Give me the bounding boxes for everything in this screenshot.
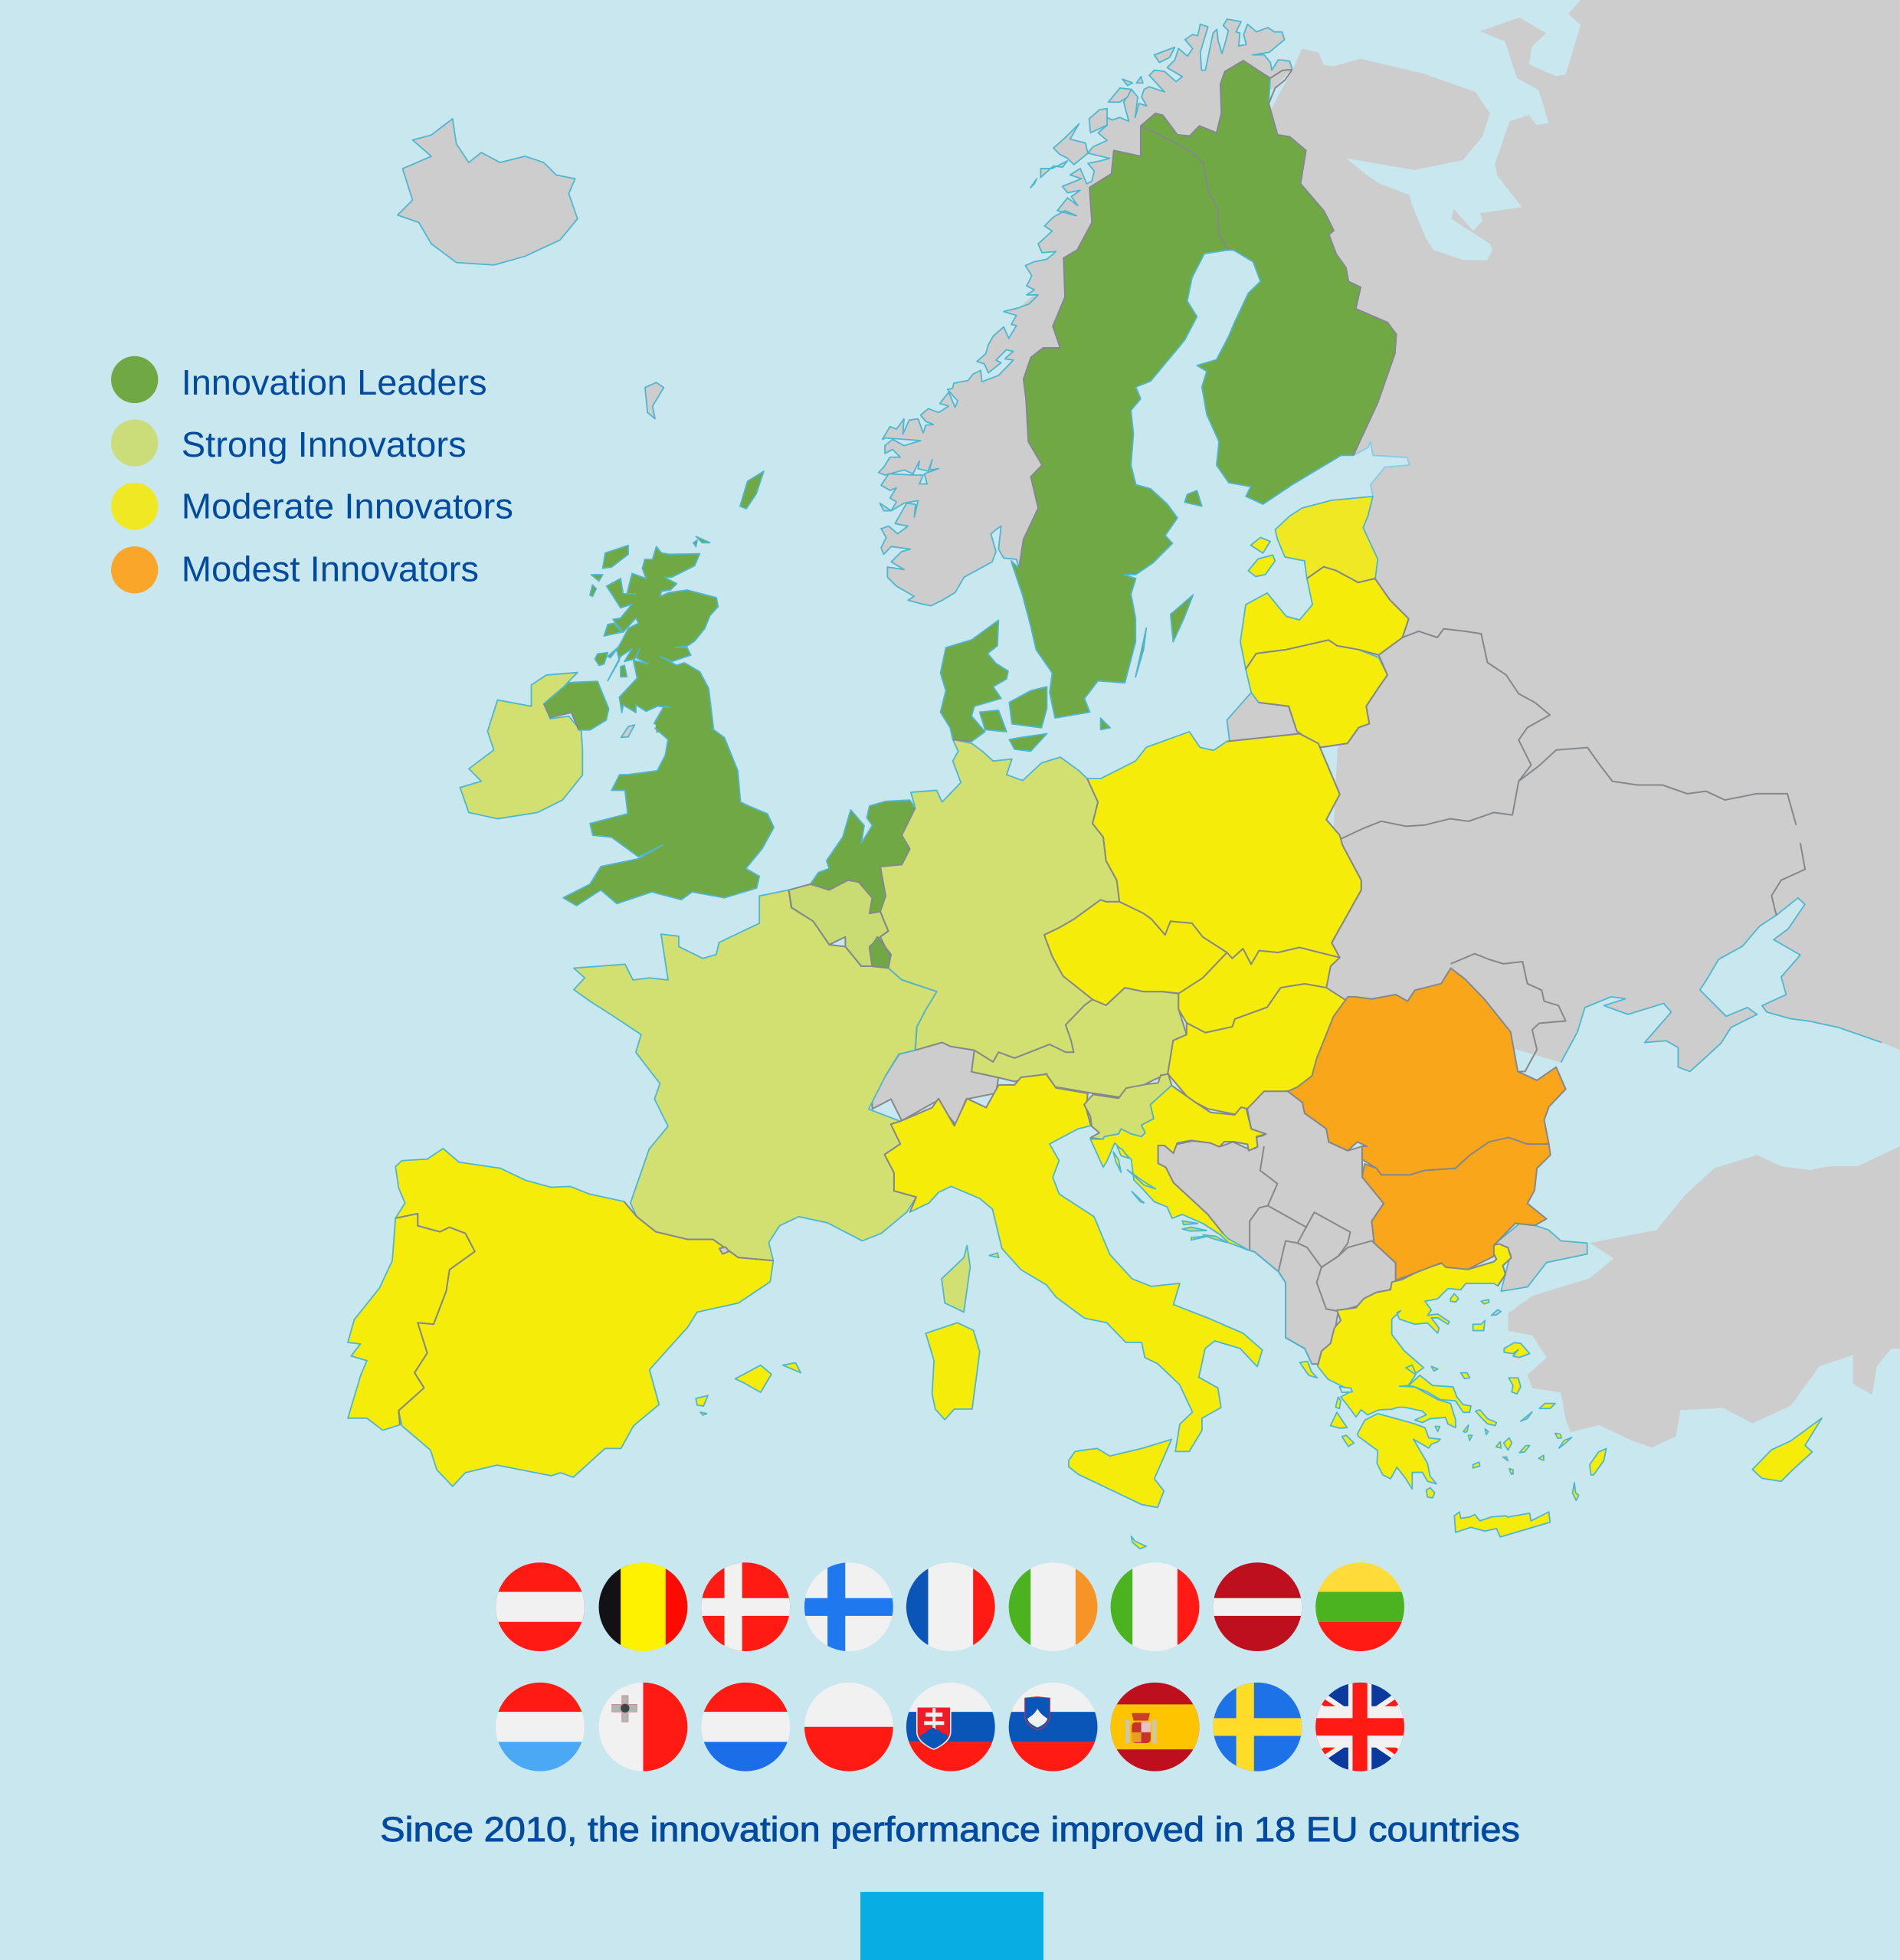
flag: Belgium <box>598 1562 688 1652</box>
Turkey <box>1509 1146 1900 1447</box>
Norway, northern coast and islands <box>1019 19 1292 308</box>
Bornholm <box>1101 718 1110 729</box>
Sardinia <box>925 1323 980 1420</box>
Andorra <box>719 1247 729 1254</box>
Gotland <box>1171 595 1193 642</box>
Orkney north <box>696 536 710 542</box>
blue footer block <box>860 1892 1043 1960</box>
Brac <box>1182 1221 1197 1224</box>
Germany western border <box>880 808 937 1050</box>
flag: Lithuania <box>1315 1562 1405 1652</box>
Denmark, Jutland <box>941 621 1008 742</box>
Lewis <box>603 546 628 569</box>
flag: Ireland <box>1008 1562 1098 1652</box>
Czech Republic <box>1044 900 1227 1005</box>
Jura <box>608 646 619 657</box>
Norway Sweden border <box>1019 126 1141 569</box>
Pag <box>1128 1170 1155 1189</box>
Corsica <box>942 1245 970 1312</box>
Montenegro border <box>1250 1206 1268 1250</box>
legend item: Innovation Leaders: Innovation Leaders <box>182 362 487 402</box>
Uist <box>591 575 603 581</box>
Cres <box>1113 1152 1121 1172</box>
Luxembourg <box>870 937 891 969</box>
flags <box>495 1562 1423 1772</box>
flag: France <box>906 1562 996 1652</box>
Baltic borders <box>1259 567 1409 747</box>
Estonia <box>1275 497 1378 582</box>
Germany <box>880 739 1119 1062</box>
Formentera <box>700 1412 706 1415</box>
Arctic islet <box>1136 77 1143 83</box>
flag: Slovakia <box>906 1682 996 1772</box>
flag: Luxembourg <box>495 1682 585 1772</box>
caption: Since 2010, the innovation performance improved in 18 EU countries <box>380 1810 1520 1849</box>
Mull <box>604 623 622 636</box>
Norway, southern coast <box>879 308 1019 606</box>
Greek mainland <box>1318 1244 1512 1427</box>
flag: Austria <box>495 1562 585 1652</box>
Oland <box>1135 628 1146 677</box>
southern Norway coast <box>879 308 1019 606</box>
flag: Denmark <box>701 1562 791 1652</box>
Germany Poland border <box>1087 778 1119 902</box>
France Spain border <box>624 1201 773 1260</box>
Belarus borders <box>1403 629 1550 782</box>
Crete <box>1454 1512 1550 1537</box>
Mallorca <box>735 1365 771 1392</box>
Switzerland <box>872 1042 998 1125</box>
Spain Portugal border <box>395 1214 475 1425</box>
Scotland coast <box>607 546 718 730</box>
Barra <box>590 585 596 596</box>
northern Norway coast <box>1019 19 1292 308</box>
Faroe Islands <box>645 382 663 419</box>
Kaliningrad <box>1227 693 1299 741</box>
Ibiza <box>696 1395 708 1406</box>
Latvia Lithuania border <box>1246 640 1379 669</box>
Finland eastern border <box>1269 70 1397 455</box>
Western and central Europe <box>563 595 1361 1125</box>
Black Sea coast line <box>1561 898 1882 1071</box>
North Macedonia border <box>1322 1241 1396 1267</box>
Ukraine Russia border near Azov <box>1771 843 1805 916</box>
legend item: Moderate Innovators <box>111 483 513 529</box>
Peljesac <box>1203 1235 1227 1243</box>
Slovakia <box>1178 948 1340 1033</box>
flag: Finland <box>804 1562 894 1652</box>
Saaremaa <box>1248 555 1275 576</box>
Romania <box>1288 969 1566 1175</box>
Hinnoya <box>1109 88 1132 102</box>
Greek islands <box>1300 1293 1607 1500</box>
map of Europe <box>348 0 1900 1549</box>
Scotland and northern England <box>590 536 718 737</box>
legend item: Strong Innovators: Strong Innovators <box>182 424 467 464</box>
Hvar <box>1182 1227 1207 1231</box>
flag: Italy <box>1110 1562 1200 1652</box>
legend item: Innovation Leaders <box>111 356 487 403</box>
Senja <box>1089 109 1107 133</box>
Latvia <box>1240 567 1409 669</box>
Slovenia <box>1084 1074 1171 1139</box>
Poland eastern border <box>1227 733 1361 958</box>
Finland Norway border <box>1141 61 1292 136</box>
Sweden <box>1011 126 1229 718</box>
Albanian coast <box>1247 1250 1312 1364</box>
flag: Malta <box>598 1682 688 1772</box>
Funen <box>980 710 1007 732</box>
Korcula <box>1191 1236 1208 1240</box>
Arctic islet <box>1122 79 1132 86</box>
Isle of Man <box>621 725 634 737</box>
flag: Sweden <box>1213 1682 1302 1772</box>
flag: United Kingdom <box>1315 1683 1404 1772</box>
flag: Slovenia <box>1008 1682 1098 1772</box>
flag: Netherlands <box>701 1682 791 1772</box>
legend item: Modest Innovators: Modest Innovators <box>182 549 479 588</box>
Western Balkans <box>1158 1091 1396 1364</box>
Bosnia Serbia border <box>1260 1146 1307 1227</box>
Moldova border <box>1451 954 1566 1071</box>
Hungary <box>1168 984 1348 1115</box>
Denmark Germany border <box>953 739 971 742</box>
Greece and the Aegean <box>1300 1244 1607 1537</box>
Ireland <box>460 673 582 819</box>
Croatia <box>1090 1086 1266 1250</box>
Ukraine northern and eastern border <box>1341 748 1796 839</box>
Evia <box>1408 1375 1471 1412</box>
Spain <box>395 1149 773 1486</box>
Malta <box>1132 1536 1146 1549</box>
Peloponnese <box>1358 1414 1440 1489</box>
Hiiumaa <box>1251 537 1270 553</box>
Italy <box>884 1074 1263 1451</box>
Croatia land borders <box>1158 1086 1266 1234</box>
Northern Ireland <box>544 681 609 730</box>
Finland, Estonia and Baltic islands <box>1141 61 1397 582</box>
Lolland <box>1009 733 1047 751</box>
Aland Islands <box>1184 490 1202 506</box>
Slovenia and Croatia <box>1084 1074 1266 1250</box>
Greece northern border <box>1318 1244 1512 1365</box>
England and Wales <box>563 728 774 906</box>
Gulf of Finland shore <box>1353 442 1410 497</box>
Netherlands <box>811 800 916 913</box>
Portugal <box>348 1214 475 1431</box>
Ambracian Gulf <box>1339 1387 1352 1392</box>
France <box>574 890 937 1260</box>
Shetland <box>740 471 764 509</box>
Albania border <box>1317 1267 1338 1311</box>
Orkney <box>693 540 697 546</box>
Great Britain join between north and south <box>655 720 711 733</box>
Turkey, European part <box>1494 1221 1587 1291</box>
Kosovo border <box>1279 1212 1350 1272</box>
Sweden Finland border <box>1141 126 1229 250</box>
Zealand <box>1009 687 1047 728</box>
Ireland border <box>544 703 578 730</box>
Belgium <box>789 880 888 966</box>
Russia and eastern Europe land mass <box>1263 0 1900 1071</box>
Lithuania <box>1246 640 1387 747</box>
flag: Spain <box>1110 1682 1200 1772</box>
Elba <box>989 1253 999 1257</box>
legend item: Modest Innovators <box>111 546 479 593</box>
Arctic island <box>1155 48 1174 63</box>
Lofoten west <box>1040 161 1067 178</box>
Sicily <box>1069 1440 1171 1508</box>
Southeast Europe, western Balkans <box>1158 1091 1396 1364</box>
Menorca <box>783 1362 801 1373</box>
Austria <box>971 988 1187 1097</box>
Iberia, Italy and western Mediterranean <box>348 1074 1263 1508</box>
France northeast border <box>789 890 889 969</box>
flag: Latvia <box>1213 1562 1302 1652</box>
Iceland <box>398 119 578 265</box>
Norway interior <box>1019 69 1292 569</box>
legend item: Moderate Innovators: Moderate Innovators <box>182 487 513 526</box>
Krk <box>1117 1147 1129 1159</box>
Dugi Otok <box>1132 1191 1144 1203</box>
Islay <box>595 653 608 665</box>
Finland <box>1141 61 1397 504</box>
Cyprus <box>1752 1418 1822 1481</box>
Rost <box>1030 179 1037 188</box>
Lofoten <box>1053 124 1088 165</box>
Southeast Europe, Romania and Bulgaria <box>1288 843 1822 1481</box>
legend <box>111 356 513 593</box>
legend item: Strong Innovators <box>111 419 467 467</box>
Poland <box>1087 732 1361 964</box>
Italy northern border <box>884 1074 1091 1212</box>
Bulgaria <box>1362 1138 1551 1280</box>
Arran <box>621 665 627 677</box>
flag: Poland <box>804 1682 894 1772</box>
